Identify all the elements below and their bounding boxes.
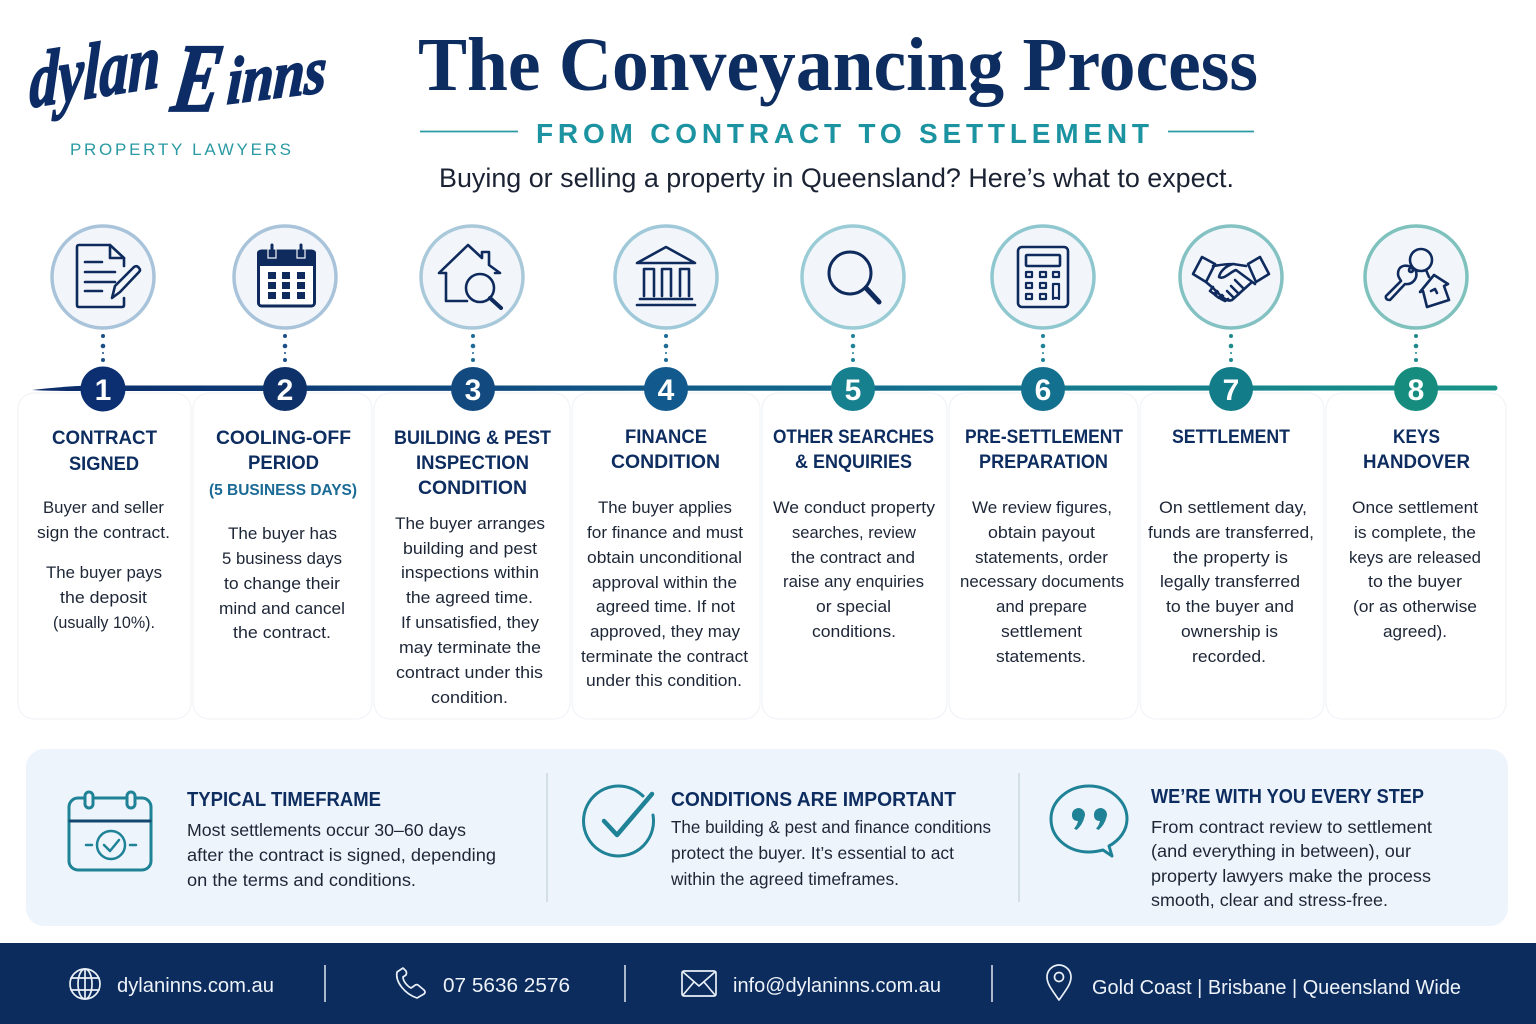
panel: key notes	[26, 749, 1508, 926]
card 6 heading: PREPARATION	[979, 451, 1108, 473]
card 7 body: to the buyer and	[1166, 598, 1294, 616]
phone	[397, 968, 570, 998]
card 7 body	[1148, 499, 1314, 666]
website: dylaninns.com.au	[117, 974, 274, 997]
note body: property lawyers make the process	[1151, 866, 1431, 886]
number badge 6	[1021, 367, 1065, 411]
card 7 body: recorded.	[1192, 648, 1266, 666]
icon: phone	[397, 968, 425, 998]
card 3 body	[395, 515, 545, 707]
card 2 body: the contract.	[233, 624, 331, 642]
card 6 body	[960, 499, 1124, 666]
panel: step cards row	[18, 393, 1506, 719]
card 5 body: raise any enquiries	[783, 573, 924, 591]
card 5: other searches and enquiries	[762, 393, 947, 719]
icon: map pin	[1047, 965, 1071, 1000]
card 6 body: statements.	[996, 648, 1086, 666]
step connectors	[101, 334, 1418, 362]
card 1 body: Buyer and seller	[43, 499, 165, 517]
phone: 07 5636 2576	[443, 974, 570, 997]
card 5 body: searches, review	[792, 524, 916, 542]
number badge 6: 6	[1035, 374, 1051, 407]
note body	[670, 817, 991, 889]
icon: calendar	[234, 226, 336, 328]
card 3: building and pest inspection	[374, 393, 570, 719]
icon: globe	[70, 969, 100, 999]
card 4 body: agreed time. If not	[596, 598, 735, 616]
footer	[0, 943, 1536, 1024]
card 4 body: under this condition.	[586, 672, 742, 690]
number badge 1: 1	[95, 374, 111, 407]
logo script wordmark: inns	[225, 33, 328, 119]
icon: calculator	[992, 226, 1094, 328]
email	[682, 971, 941, 997]
email: info@dylaninns.com.au	[733, 974, 941, 997]
card 8 heading: HANDOVER	[1363, 451, 1470, 473]
number badge 3: 3	[465, 374, 481, 407]
title: The Conveyancing Process	[418, 23, 1258, 107]
card 3 body: If unsatisfied, they	[401, 614, 540, 632]
logo script wordmark: dylan	[29, 17, 161, 126]
note heading: WE’RE WITH YOU EVERY STEP	[1151, 786, 1424, 808]
locations	[1047, 965, 1461, 1000]
card 5 heading: OTHER SEARCHES	[773, 426, 934, 448]
card 1 body	[37, 499, 170, 632]
card 5 body	[773, 499, 936, 641]
card 5 heading	[773, 426, 934, 473]
timeline line	[32, 386, 1498, 391]
note body: (and everything in between), our	[1151, 841, 1411, 861]
card 4 body: for finance and must	[587, 524, 743, 542]
icon: bank building	[615, 226, 717, 328]
number badge 4	[644, 367, 688, 411]
card 8 body: keys are released	[1349, 549, 1481, 567]
card 3 body: the agreed time.	[406, 589, 533, 607]
card 6 body: settlement	[1001, 623, 1082, 641]
card 2 heading: COOLING-OFF	[216, 427, 351, 449]
note body: on the terms and conditions.	[187, 870, 416, 890]
card 2 body: mind and cancel	[219, 600, 345, 618]
website	[70, 969, 274, 999]
card 5 body: or special	[816, 598, 891, 616]
card 2 body: 5 business days	[222, 550, 342, 568]
number badge 5	[831, 367, 875, 411]
card 6 body: statements, order	[975, 549, 1109, 567]
note body	[1151, 817, 1432, 910]
note body: Most settlements occur 30–60 days	[187, 820, 466, 840]
card 4 body: approval within the	[592, 574, 737, 592]
card 6 body: necessary documents	[960, 573, 1124, 591]
logo script wordmark: E	[166, 24, 230, 133]
card 3 body: The buyer arranges	[395, 515, 545, 533]
card 3 heading: INSPECTION	[416, 452, 529, 474]
card 1 heading	[52, 427, 157, 475]
number badge 7	[1209, 367, 1253, 411]
icon: handshake	[1180, 226, 1282, 328]
logo tagline: PROPERTY LAWYERS	[70, 140, 291, 159]
card 6: pre-settlement preparation	[949, 393, 1138, 719]
tagline: Buying or selling a property in Queensland? Here’s what to expect.	[439, 163, 1234, 193]
card 8 body: to the buyer	[1368, 573, 1463, 591]
locations: Gold Coast | Brisbane | Queensland Wide	[1092, 976, 1461, 999]
card 4 body: approved, they may	[590, 623, 741, 641]
note body	[187, 820, 496, 890]
icon: document and pen	[52, 226, 154, 328]
icon: house inspection	[421, 226, 523, 328]
note body: The building & pest and finance conditions	[671, 817, 991, 837]
icon: calendar check	[69, 792, 151, 870]
card 3 body: inspections within	[401, 564, 539, 582]
card 1 heading: SIGNED	[69, 453, 139, 475]
note: typical timeframe	[69, 789, 496, 890]
card 1 body: The buyer pays	[46, 564, 162, 582]
card 6 heading: PRE-SETTLEMENT	[965, 426, 1123, 448]
card 7 body: the property is	[1173, 549, 1288, 567]
card 3 body: condition.	[431, 689, 508, 707]
note heading: CONDITIONS ARE IMPORTANT	[671, 789, 956, 811]
card 1 body: sign the contract.	[37, 524, 170, 542]
card 2 body: to change their	[224, 575, 341, 593]
card 3 body: contract under this	[396, 664, 543, 682]
card 7: settlement	[1140, 393, 1324, 719]
note body: From contract review to settlement	[1151, 817, 1432, 837]
card 8 heading: KEYS	[1393, 426, 1440, 448]
card 7 body: ownership is	[1181, 623, 1278, 641]
note body: within the agreed timeframes.	[670, 869, 899, 889]
note: with you every step	[1051, 786, 1432, 910]
note: conditions are important	[584, 786, 991, 889]
card 4 body: terminate the contract	[581, 648, 748, 666]
card 4 heading: FINANCE	[625, 426, 707, 448]
note body: after the contract is signed, depending	[187, 845, 496, 865]
card 5 body: the contract and	[791, 549, 915, 567]
logo	[29, 17, 328, 159]
card 7 body: funds are transferred,	[1148, 524, 1314, 542]
note heading: TYPICAL TIMEFRAME	[187, 789, 381, 811]
card 8 body: is complete, the	[1354, 524, 1476, 542]
card 4 heading: CONDITION	[611, 451, 720, 473]
card 2 body: The buyer has	[228, 525, 337, 543]
card 8 body: (or as otherwise	[1353, 598, 1477, 616]
card 8: keys handover	[1326, 393, 1506, 719]
card 3 body: may terminate the	[399, 639, 541, 657]
card 3 heading	[394, 427, 551, 499]
card 4 heading	[611, 426, 720, 473]
card 4: finance condition	[572, 393, 760, 719]
card 1 heading: CONTRACT	[52, 427, 157, 449]
card 1 body: (usually 10%).	[53, 614, 155, 632]
card 7 body: legally transferred	[1160, 573, 1300, 591]
number badge 4: 4	[658, 374, 675, 407]
card 2 heading: PERIOD	[248, 452, 319, 474]
number badge 1	[80, 366, 126, 412]
number badge 2: 2	[277, 374, 293, 407]
card 8 body	[1349, 499, 1481, 641]
card 2 heading	[209, 427, 357, 499]
note body: smooth, clear and stress-free.	[1151, 890, 1388, 910]
logo script wordmark	[29, 17, 328, 133]
card 3 heading: CONDITION	[418, 477, 527, 499]
card 4 body	[581, 499, 748, 690]
card 5 heading: & ENQUIRIES	[795, 451, 912, 473]
number badge 5: 5	[845, 374, 861, 407]
icon: magnifying glass	[802, 226, 904, 328]
card 5 body: conditions.	[812, 623, 896, 641]
card 6 body: and prepare	[996, 598, 1087, 616]
card 8 heading	[1363, 426, 1470, 473]
number badge 7: 7	[1223, 374, 1239, 407]
number badge 2	[263, 367, 307, 411]
icon: keys with house tag	[1365, 226, 1467, 328]
card 6 body: We review figures,	[972, 499, 1112, 517]
icon: check circle	[584, 786, 654, 856]
card 7 heading: SETTLEMENT	[1172, 426, 1290, 448]
icon: speech bubble	[1051, 786, 1127, 856]
card 3 heading: BUILDING & PEST	[394, 427, 551, 449]
card 3 body: building and pest	[403, 540, 537, 558]
card 1: contract signed	[18, 393, 191, 719]
note body: protect the buyer. It’s essential to act	[671, 843, 954, 863]
icon: envelope	[682, 971, 716, 996]
card 6 body: obtain payout	[988, 524, 1095, 542]
card 7 body: On settlement day,	[1159, 499, 1307, 517]
card 2: cooling-off period	[193, 393, 372, 719]
card 6 heading	[965, 426, 1123, 473]
number badge 8: 8	[1408, 374, 1424, 407]
card 2 body	[219, 525, 345, 642]
card 4 body: The buyer applies	[598, 499, 732, 517]
card 1 body: the deposit	[60, 589, 147, 607]
card 2 heading: (5 BUSINESS DAYS)	[209, 482, 357, 499]
subtitle with rules: FROM CONTRACT TO SETTLEMENT	[536, 118, 1149, 149]
card 8 body: Once settlement	[1352, 499, 1478, 517]
card 5 body: We conduct property	[773, 499, 936, 517]
number badge 3	[451, 367, 495, 411]
card 8 body: agreed).	[1383, 623, 1447, 641]
number badge 8	[1394, 367, 1438, 411]
card 4 body: obtain unconditional	[587, 549, 742, 567]
